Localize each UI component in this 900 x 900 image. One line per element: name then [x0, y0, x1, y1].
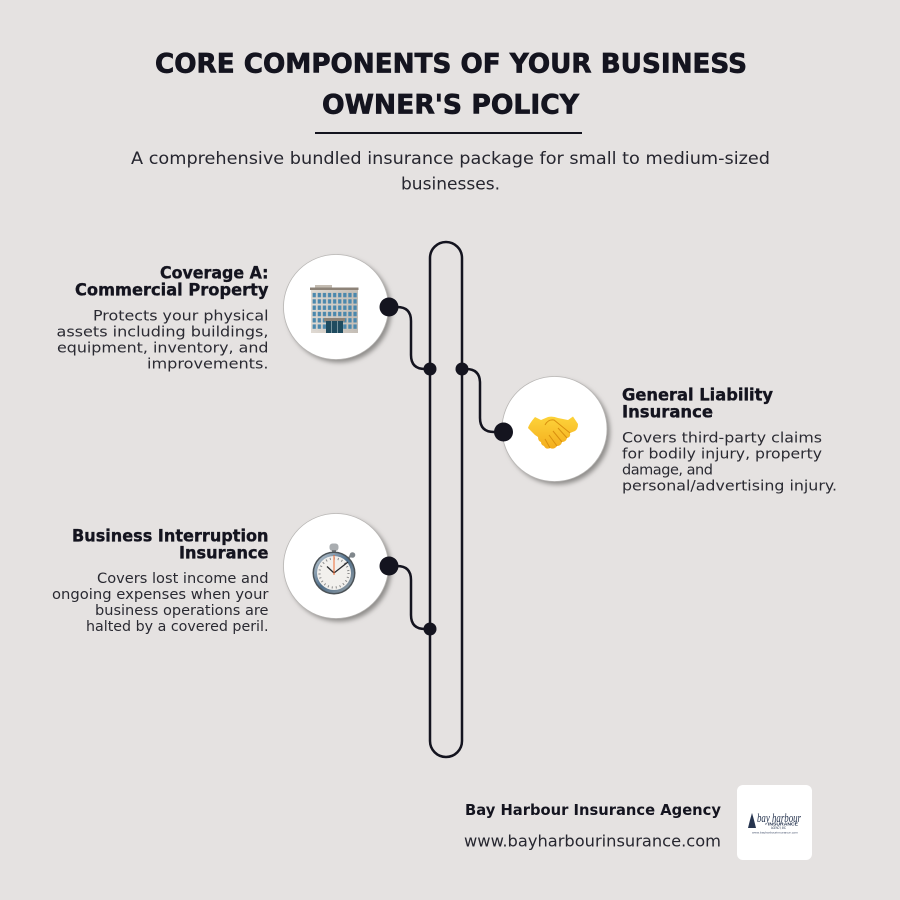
footer: agency details	[464, 801, 721, 850]
footer logo tile	[737, 785, 812, 860]
text: general liability description: damage, and	[622, 462, 713, 478]
title: CORE COMPONENTS OF YOUR BUSINESS	[155, 48, 747, 80]
text: business interruption description	[52, 571, 269, 635]
heading: business interruption: Insurance	[179, 544, 268, 562]
panel: commercial property	[56, 254, 398, 372]
heading: general liability: General Liability	[622, 386, 773, 404]
panel: business interruption	[52, 514, 398, 635]
text: general liability description	[622, 430, 837, 494]
panel: general liability	[494, 376, 837, 494]
icon: lighthouse mark	[748, 813, 756, 828]
heading: general liability	[622, 386, 773, 422]
connector: business interruption	[389, 566, 430, 629]
text: business interruption description: Covers lost income and	[97, 571, 268, 587]
text: business interruption description: ongoing expenses when your	[52, 587, 269, 603]
text: business interruption description: halted by a covered peril.	[86, 619, 268, 635]
logo wordmark	[752, 810, 802, 834]
connector node: commercial property	[380, 298, 398, 316]
text: coverage A description: improvements.	[147, 356, 268, 372]
icon: handshake	[528, 416, 578, 449]
footer: agency details: www.bayharbourinsurance.com	[464, 832, 721, 850]
icon disc: commercial property	[284, 254, 392, 362]
footer: agency details: Bay Harbour Insurance Agency	[465, 801, 721, 819]
heading: coverage A: Commercial Property	[75, 280, 269, 300]
connector: commercial property	[389, 307, 430, 369]
text: coverage A description: assets including buildings,	[56, 324, 268, 340]
heading: general liability: Insurance	[622, 402, 713, 422]
connector node: general liability	[494, 422, 513, 442]
icon disc: business interruption	[284, 514, 392, 622]
subtitle	[131, 149, 770, 194]
logo wordmark: INSURANCE	[768, 822, 798, 826]
text: coverage A description: equipment, inventory, and	[57, 340, 268, 356]
logo wordmark: bay harbour	[757, 810, 802, 825]
title	[155, 48, 747, 120]
text: coverage A description: Protects your physical	[93, 308, 268, 324]
text: general liability description: Covers third-party claims	[622, 430, 822, 446]
heading: business interruption	[72, 526, 268, 562]
heading: coverage A: Coverage A:	[160, 264, 268, 282]
text: general liability description: for bodily injury, property	[622, 446, 822, 462]
connector node: business interruption	[380, 556, 398, 576]
central capsule timeline	[430, 242, 462, 757]
title underline	[315, 132, 582, 134]
connector: general liability	[462, 369, 503, 432]
text: general liability description: personal/advertising injury.	[622, 478, 837, 494]
icon disc: general liability	[502, 376, 610, 484]
subtitle: A comprehensive bundled insurance package for small to medium-sized	[131, 149, 770, 169]
timeline nodes	[424, 362, 468, 636]
logo wordmark: AGENCY, INC	[771, 826, 786, 830]
subtitle: businesses.	[401, 174, 500, 194]
heading: coverage A	[75, 264, 269, 300]
text: coverage A description	[56, 308, 268, 372]
logo wordmark: www.bayharbourinsurance.com	[752, 832, 798, 834]
heading: business interruption: Business Interruption	[72, 526, 268, 546]
text: business interruption description: business operations are	[95, 603, 269, 619]
title: OWNER'S POLICY	[322, 90, 580, 120]
icon: stopwatch	[312, 544, 356, 594]
icon: office building	[310, 285, 358, 333]
